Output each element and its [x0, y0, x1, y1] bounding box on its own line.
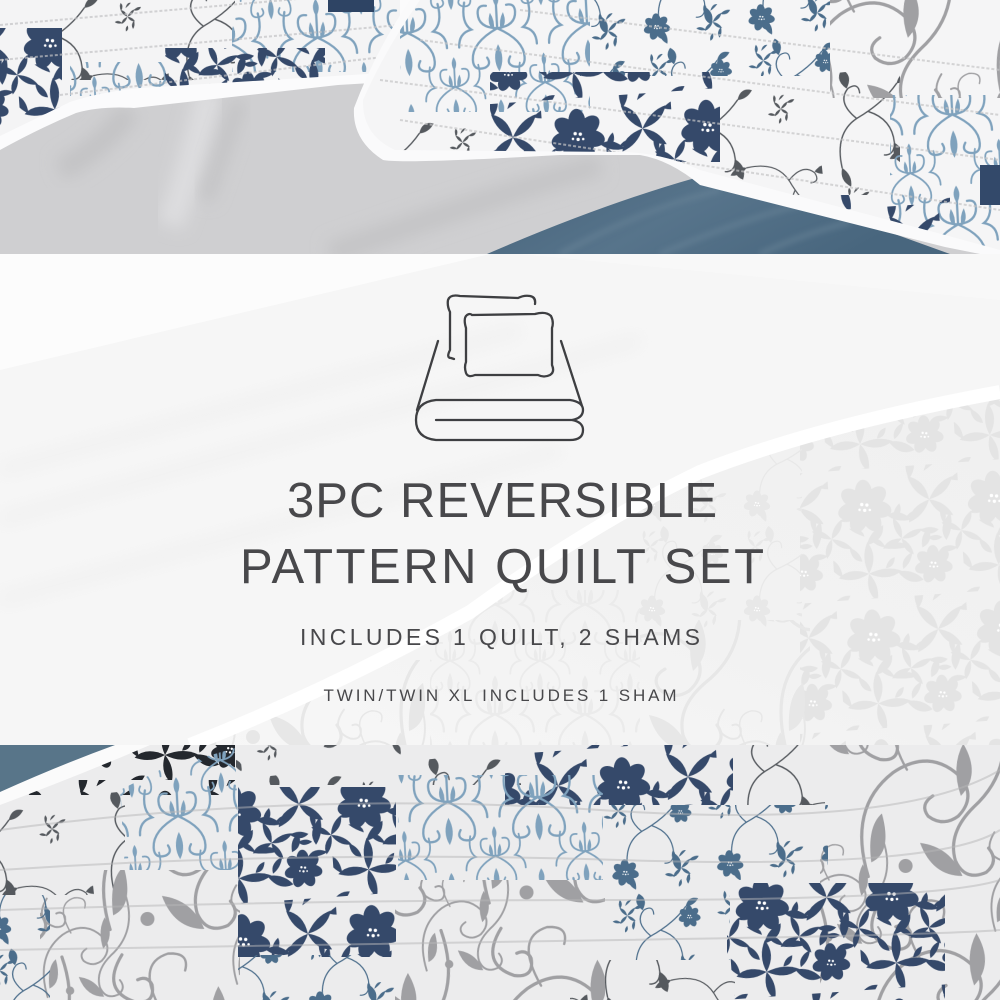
pale quilt pattern showing through — [190, 392, 1000, 745]
patch: gray scrolls — [40, 745, 1000, 1000]
patch: dark floral corner — [28, 745, 235, 795]
patch: navy floral centre-left — [238, 787, 396, 957]
blue quilt underside (top) — [487, 178, 950, 254]
icon part: back pillow — [448, 296, 535, 359]
text: twin size note: TWIN/TWIN XL INCLUDES 1 SHAM — [324, 686, 676, 705]
patch: sprigs — [0, 745, 825, 1000]
heading: product title: PATTERN QUILT SET — [240, 540, 764, 594]
icon part: folded sheet — [416, 341, 583, 440]
heading: product title: 3PC REVERSIBLE — [287, 474, 717, 528]
center translucent panel — [0, 254, 1000, 745]
patch: blue damask left — [120, 748, 240, 870]
right pillow sham — [350, 0, 1000, 260]
photo: patchwork quilt — [0, 745, 1000, 1000]
patch: navy floral lower right — [727, 883, 945, 1000]
patch: blue botanical — [0, 805, 828, 1000]
patch: blue corner with white hem — [0, 745, 150, 805]
icon: folded sheet set with pillows — [416, 296, 583, 440]
photo: gray sheet backdrop — [0, 0, 1000, 254]
heading: product title — [240, 474, 764, 594]
quilting stitch lines — [0, 770, 1000, 950]
icon part: front pillow — [465, 313, 553, 376]
text: set contents: INCLUDES 1 QUILT, 2 SHAMS — [300, 624, 700, 650]
patch: navy floral top centre — [505, 745, 733, 805]
left pillow sham — [0, 0, 420, 150]
patch: blue damask centre — [398, 775, 603, 880]
